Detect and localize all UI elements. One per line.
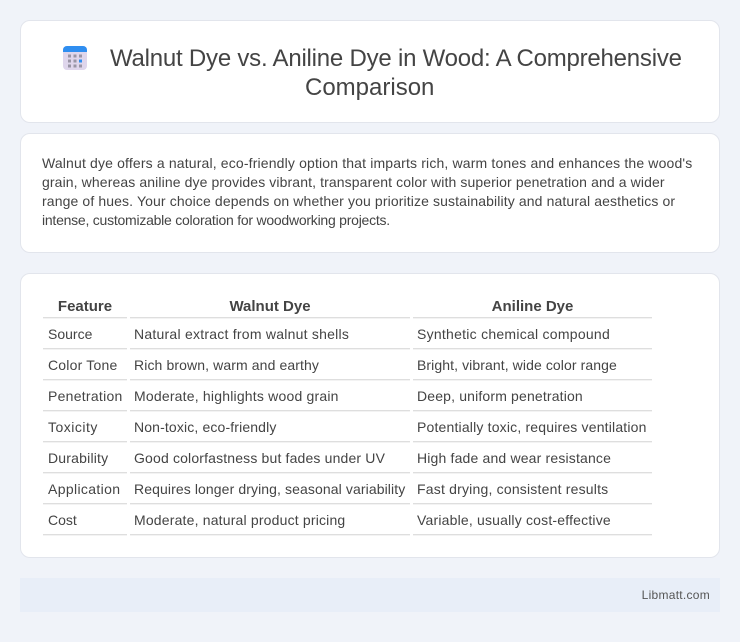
row: Cost: Variable, usually cost-effective — [417, 512, 611, 528]
row: Durability: Durability — [48, 450, 108, 466]
title — [110, 45, 682, 101]
row: Penetration: Penetration — [48, 388, 123, 404]
table header: Feature — [58, 298, 112, 315]
row: Penetration: Deep, uniform penetration — [417, 388, 583, 404]
panel: summary — [20, 133, 720, 253]
row: Toxicity: Non-toxic, eco-friendly — [134, 419, 276, 435]
row: Color Tone: Rich brown, warm and earthy — [134, 357, 319, 373]
text block: summary paragraph: grain, whereas aniline dye provides vibrant, transparent color with superior penetration and a wider — [42, 174, 665, 190]
row: Penetration — [43, 388, 652, 412]
title: Walnut Dye vs. Aniline Dye in Wood: A Comprehensive — [110, 45, 682, 72]
footer credit: Libmatt.com — [642, 588, 710, 602]
row: Cost: Moderate, natural product pricing — [134, 512, 345, 528]
row: Color Tone: Color Tone — [48, 357, 117, 373]
row: Durability — [43, 450, 652, 474]
row: Application — [43, 481, 652, 505]
row: Toxicity — [43, 419, 652, 443]
row: Color Tone — [43, 357, 652, 381]
row: Application: Fast drying, consistent results — [417, 481, 608, 497]
table header — [43, 298, 652, 319]
text block: summary paragraph: intense, customizable coloration for woodworking projects. — [42, 212, 390, 228]
panel: title card — [20, 20, 720, 123]
table header: Walnut Dye — [229, 298, 311, 315]
row: Penetration: Moderate, highlights wood grain — [134, 388, 339, 404]
row: Source: Synthetic chemical compound — [417, 326, 610, 342]
row: Application: Application — [48, 481, 120, 497]
row: Durability: Good colorfastness but fades under UV — [134, 450, 385, 466]
text block: summary paragraph: range of hues. Your choice depends on whether you prioritize sustainability and natural aesthetics or — [42, 193, 675, 209]
row: Toxicity: Toxicity — [48, 419, 98, 435]
row: Application: Requires longer drying, seasonal variability — [134, 481, 405, 497]
row: Cost: Cost — [48, 512, 77, 528]
table header: Aniline Dye — [492, 298, 573, 315]
row: Cost — [43, 512, 652, 536]
row: Source: Source — [48, 326, 92, 342]
icon: calendar — [63, 46, 87, 70]
panel: comparison table — [20, 273, 720, 558]
title: Comparison — [305, 74, 434, 101]
row: Color Tone: Bright, vibrant, wide color range — [417, 357, 617, 373]
footer — [20, 578, 720, 612]
row: Source: Natural extract from walnut shells — [134, 326, 349, 342]
text block: summary paragraph — [42, 155, 692, 228]
text block: summary paragraph: Walnut dye offers a natural, eco-friendly option that imparts rich, warm tones and enhances the wood's — [42, 155, 692, 171]
row: Durability: High fade and wear resistance — [417, 450, 611, 466]
row: Toxicity: Potentially toxic, requires ventilation — [417, 419, 647, 435]
row: Source — [43, 326, 652, 350]
